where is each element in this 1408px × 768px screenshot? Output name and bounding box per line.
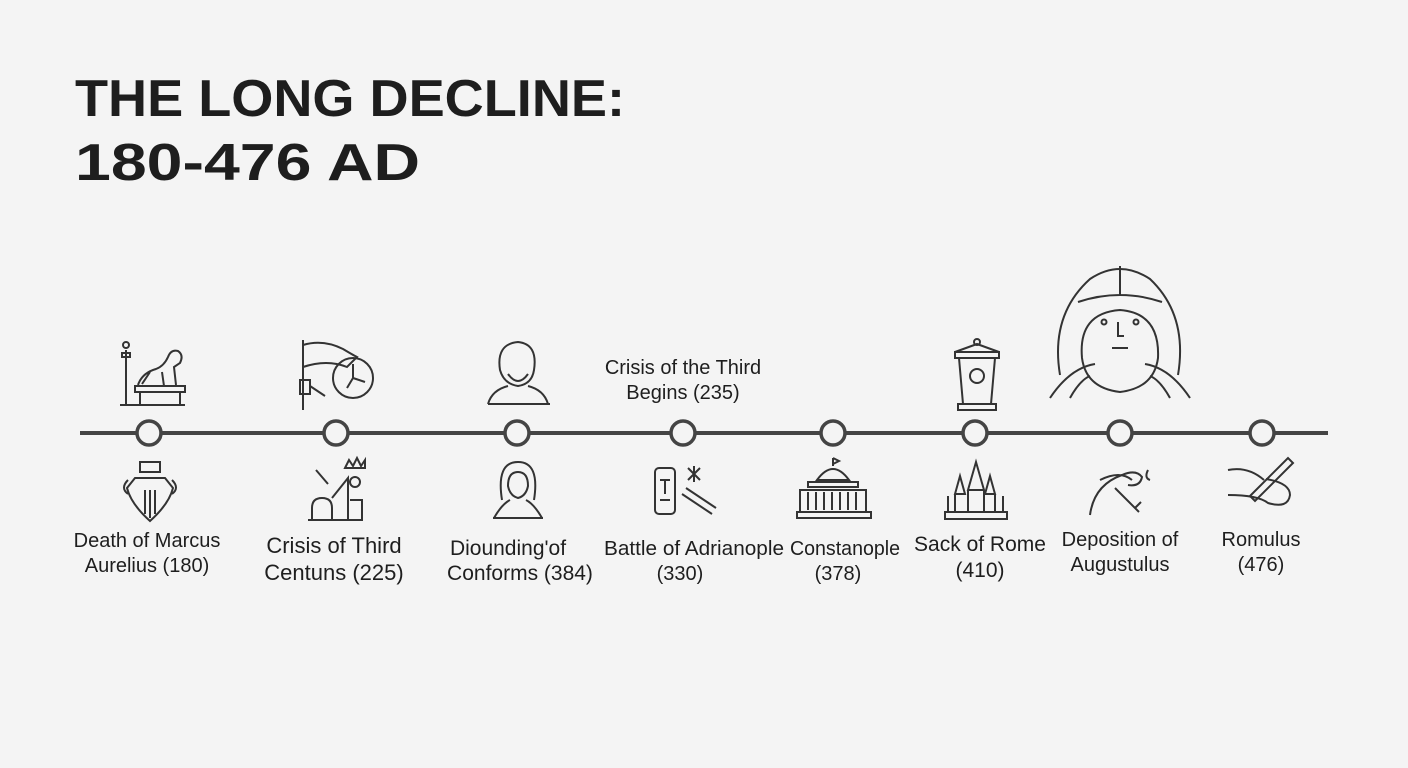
timeline axis: [80, 421, 1328, 445]
icon: capitol building: [797, 458, 871, 518]
label: sack of rome: Sack of Rome: [914, 533, 1046, 556]
label: constantinople: Constanople: [790, 538, 900, 560]
label: battle of adrianople: (330): [657, 563, 703, 585]
label: constantinople: (378): [815, 563, 861, 585]
label: deposition of augustulus: Augustulus: [1071, 554, 1169, 576]
callout: crisis of the third begins: Crisis of the Third: [605, 357, 761, 379]
label: death of marcus aurelius: Aurelius (180): [85, 555, 209, 577]
title: THE LONG DECLINE:: [75, 70, 625, 128]
label: deposition of augustulus: Deposition of: [1062, 529, 1179, 551]
icon: scroll and tools: [655, 466, 716, 514]
icon: statue on plinth: [120, 342, 185, 405]
label: sack of rome: (410): [955, 559, 1005, 582]
label: crisis of third century: Crisis of Third: [266, 533, 402, 558]
label: romulus: [1222, 529, 1300, 576]
icon: flag and clock: [300, 340, 373, 410]
label: constantinople: [790, 538, 900, 585]
label: crisis of third century: Centuns (225): [264, 560, 404, 585]
callout: crisis of the third begins: [605, 357, 761, 404]
icon: amphora: [124, 462, 176, 521]
title: [75, 70, 625, 192]
label: founding of conforms: Conforms (384): [447, 562, 593, 585]
icon: large hooded face: [1050, 266, 1190, 398]
icon: hand with quill: [1228, 458, 1293, 505]
label: crisis of third century: [264, 533, 404, 585]
title: 180-476 AD: [75, 134, 420, 192]
label: deposition of augustulus: [1062, 529, 1179, 576]
label: battle of adrianople: Battle of Adrianople: [604, 538, 784, 560]
label: romulus: Romulus: [1222, 529, 1300, 551]
icon: sword and hand: [1090, 470, 1150, 515]
callout: crisis of the third begins: Begins (235): [626, 382, 740, 404]
icon: bearded face: [488, 342, 550, 404]
label: founding of conforms: Diounding'of: [450, 537, 566, 560]
label: death of marcus aurelius: [74, 530, 220, 577]
icon: lantern: [955, 339, 999, 410]
icon: cathedral spires: [945, 462, 1007, 519]
label: romulus: (476): [1238, 554, 1284, 576]
icon: ruins and crown: [308, 458, 365, 520]
label: death of marcus aurelius: Death of Marcus: [74, 530, 220, 552]
icon: hooded face small: [493, 462, 543, 518]
label: sack of rome: [914, 533, 1046, 582]
label: founding of conforms: [447, 537, 593, 585]
label: battle of adrianople: [604, 538, 784, 585]
